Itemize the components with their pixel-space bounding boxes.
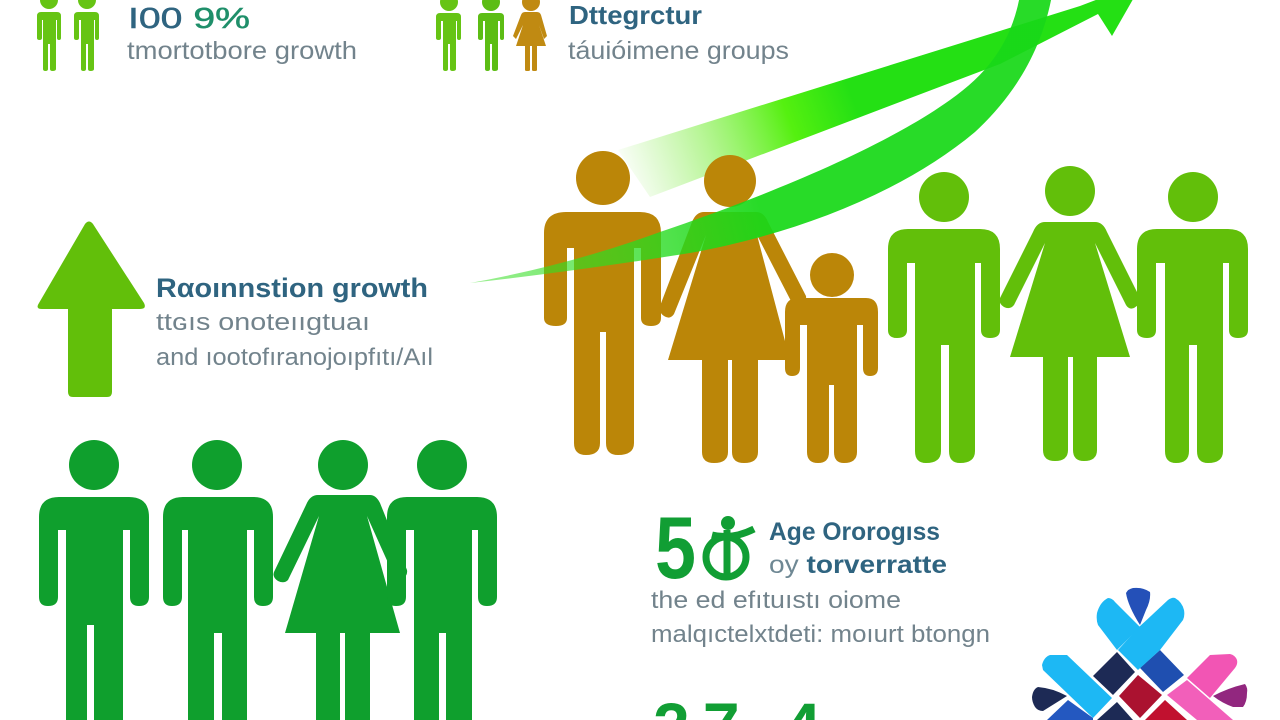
top leaf <box>1126 588 1150 625</box>
blue diamond <box>1140 650 1184 692</box>
body line 2: malqıctelxtdeti: moıurt btongn <box>651 621 990 648</box>
icon group: dark green people <box>39 440 497 720</box>
icon: ring with figure <box>706 516 754 580</box>
icon: small man 1 <box>37 0 61 71</box>
arrow: curved green arrow <box>470 0 1052 283</box>
arrow: straight fading green arrow <box>618 0 1136 197</box>
stat value: I00 9% <box>128 3 250 35</box>
right purple leaf <box>1213 684 1247 707</box>
stat number: 5 <box>655 498 696 597</box>
body line 1: ttԍıs onoteııgtuaı <box>156 309 370 336</box>
pink upper band <box>1187 654 1237 698</box>
icon: dark green man 3 <box>387 440 497 720</box>
dark diamond <box>1093 652 1135 695</box>
icon: dark green woman <box>274 440 407 720</box>
stat caption: táuióimene groups <box>568 37 789 65</box>
icon: brown man <box>544 151 661 455</box>
lower left cyan band <box>1042 655 1112 718</box>
lower red <box>1145 700 1187 720</box>
icon: brown woman <box>660 155 806 463</box>
icon: small man 4 <box>478 0 504 71</box>
stat heading: Dttegrctur <box>569 0 702 30</box>
icon: light green woman <box>1000 166 1140 461</box>
icon: small woman <box>513 0 547 71</box>
stat heading line 1: Age Ororogıss <box>769 518 940 546</box>
lower navy diamond <box>1097 702 1133 720</box>
block heading: Rαoınnstion growth <box>156 273 428 303</box>
right cyan band <box>1118 598 1184 670</box>
icon: colourful diamond logo <box>1032 588 1247 720</box>
icon: light green man 2 <box>1137 172 1248 463</box>
body line 1: the ed efıtuıstı oiome <box>651 587 901 614</box>
icon: small man 3 <box>436 0 461 71</box>
icon: brown child <box>785 253 878 463</box>
stat caption: tmortotbore growth <box>127 37 357 65</box>
icon: small man 2 <box>74 0 99 71</box>
left cyan band <box>1097 598 1140 650</box>
stat: age groups <box>651 498 990 648</box>
icon: dark green man 2 <box>163 440 273 720</box>
lower left blue <box>1047 700 1093 720</box>
text block: population growth <box>156 273 433 371</box>
body line 2: and ıootofıranojoıpfıtı/Aıl <box>156 344 433 371</box>
stat: top middle people icons <box>436 0 547 71</box>
stat: top middle text <box>568 0 789 65</box>
stat heading line 2: oy torverratte <box>769 551 947 579</box>
stat: top left text <box>127 3 357 65</box>
icon: light green man 1 <box>888 172 1000 463</box>
pink lower band <box>1167 680 1233 720</box>
red diamond <box>1119 675 1162 718</box>
left navy leaf <box>1032 687 1067 711</box>
icon: upward arrow <box>38 222 145 397</box>
icon: dark green man 1 <box>39 440 149 720</box>
stat: top left people icons <box>37 0 99 71</box>
